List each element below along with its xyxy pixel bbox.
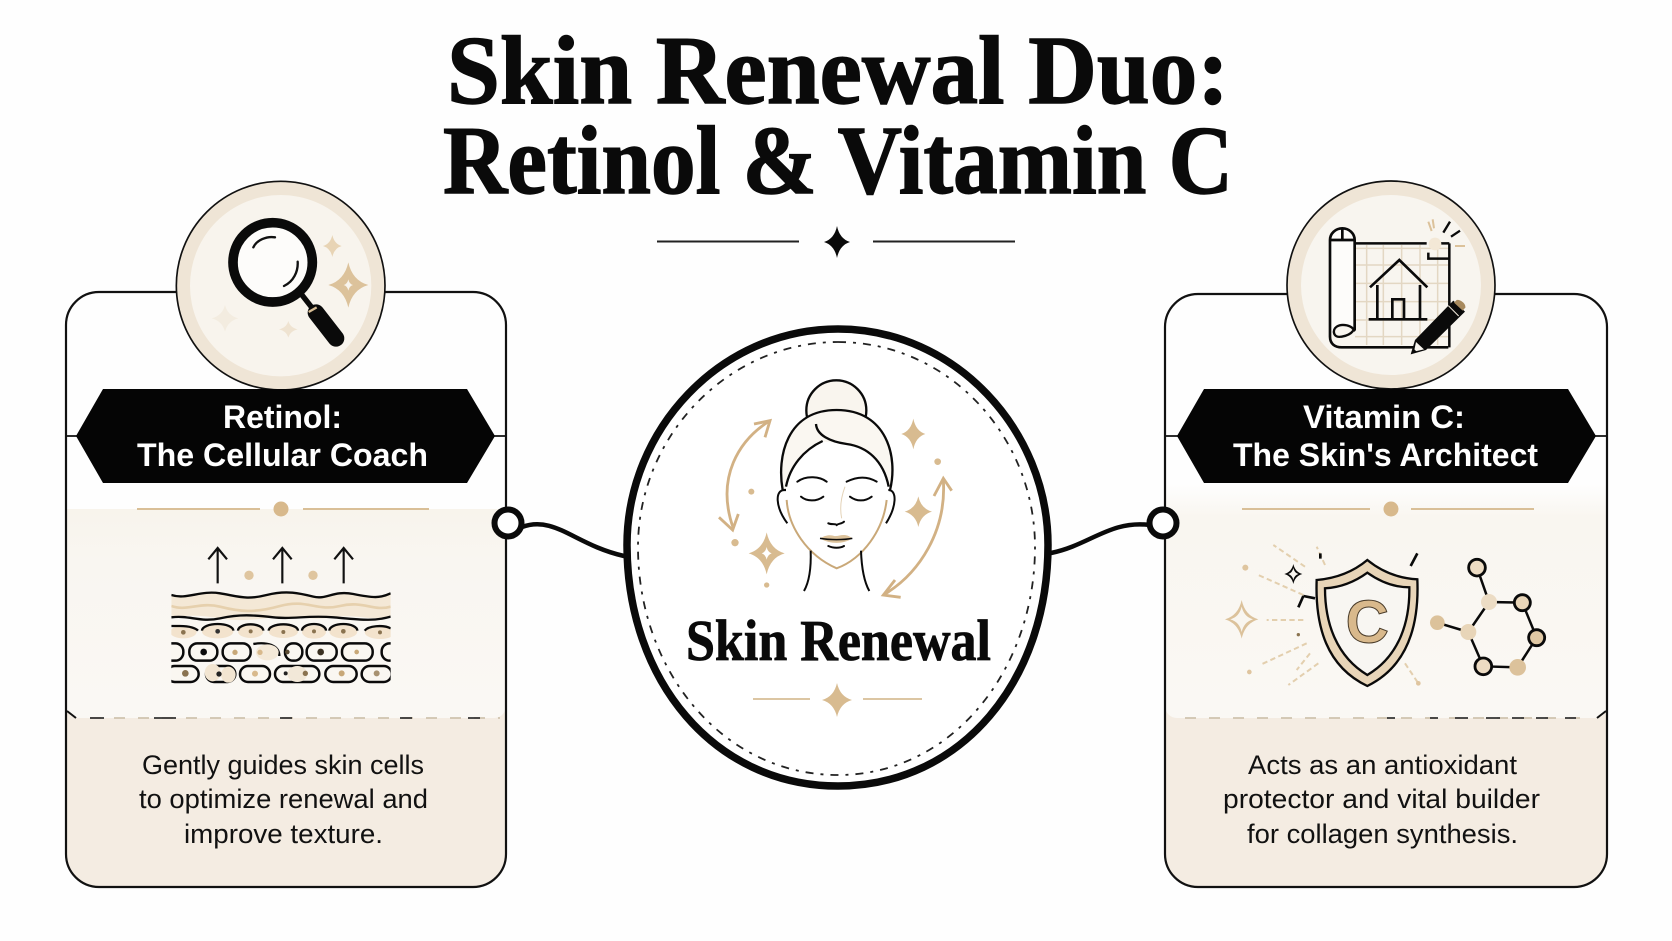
icon: magnifying glass badge [176, 181, 385, 390]
ribbon: retinol heading: The Cellular Coach [137, 437, 428, 473]
title ornament [657, 226, 1015, 258]
connector: vitamin c to centre [1051, 510, 1176, 553]
icon: woman's face with renewal arrows [719, 380, 952, 597]
text: vitamin c description: for collagen synthesis. [1247, 819, 1518, 849]
text: vitamin c description: Acts as an antioxidant [1248, 750, 1517, 780]
ribbon: vitamin c heading: The Skin's Architect [1233, 437, 1538, 473]
panel: centre skin renewal badge [627, 329, 1048, 786]
connector: retinol to centre [494, 510, 624, 556]
title: Skin Renewal Duo: [447, 17, 1229, 125]
divider [137, 502, 429, 516]
text: vitamin c description: protector and vital builder [1223, 784, 1540, 814]
icon: blueprint badge [1287, 181, 1495, 389]
icon: vitamin c shield, rays and molecule [1225, 545, 1545, 686]
divider [1242, 502, 1534, 516]
text: retinol description: improve texture. [184, 819, 383, 849]
ornament: gold star divider [753, 683, 922, 717]
ribbon: vitamin c heading [1177, 389, 1596, 483]
title [443, 17, 1233, 215]
title: Retinol & Vitamin C [443, 107, 1233, 215]
panel: retinol [66, 181, 506, 887]
icon: vitamin c shield, rays and molecule: C [1346, 589, 1389, 656]
card background [1165, 294, 1607, 887]
card background [66, 292, 506, 887]
panel: vitamin c [1165, 181, 1607, 887]
ribbon: retinol heading [76, 389, 495, 483]
text: retinol description: to optimize renewal and [139, 784, 428, 814]
text: vitamin c description [1223, 750, 1540, 849]
ribbon: retinol heading: Retinol: [223, 399, 342, 435]
ribbon: vitamin c heading: Vitamin C: [1303, 399, 1465, 435]
text: retinol description [139, 750, 428, 849]
text: retinol description: Gently guides skin cells [142, 750, 424, 780]
heading: skin renewal: Skin Renewal [686, 608, 991, 673]
icon: skin layers with rising arrows [171, 546, 391, 684]
